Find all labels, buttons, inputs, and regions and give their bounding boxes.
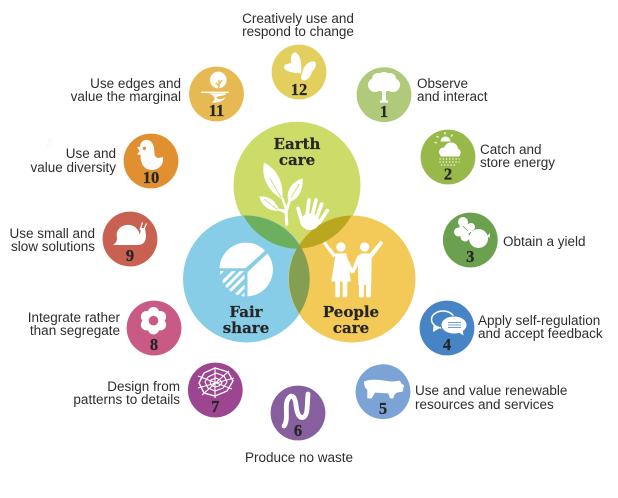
principle 4: apply self-regulation: [420, 301, 603, 355]
label: Integrate rather: [28, 310, 120, 325]
principle 12: respond to change: 12: [291, 80, 307, 99]
principle 2: catch and store energy: [421, 130, 555, 184]
principle 11: edges and the marginal: 11: [209, 101, 224, 120]
icon: speech bubbles: [432, 311, 467, 336]
label: Use and: [66, 146, 116, 161]
principle 5: renewable resources: [356, 364, 567, 419]
label: than segregate: [30, 323, 120, 338]
label: Catch and: [480, 142, 542, 157]
icon: plant and hand: [259, 163, 327, 230]
principle 5: renewable resources: 5: [379, 399, 387, 418]
circle: fair share: [183, 216, 310, 342]
label: Design from: [107, 379, 180, 394]
principle 6: produce no waste: 6: [294, 421, 302, 440]
overlap: earth and people care: [297, 216, 352, 249]
heading: earth care: Earth: [274, 135, 321, 153]
icon: butterfly: [284, 52, 316, 80]
icon: two people: [323, 241, 383, 297]
label: store energy: [480, 155, 555, 170]
icon: spider web: [198, 367, 234, 398]
icon: snail: [113, 222, 146, 245]
label: value the marginal: [71, 89, 181, 104]
label: Produce no waste: [245, 450, 353, 465]
label: respond to change: [242, 24, 354, 39]
principle 3: obtain a yield: [443, 213, 586, 267]
icon: tree on river bank: [201, 72, 229, 103]
principle 4: apply self-regulation: 4: [443, 335, 451, 354]
icon: flower: [141, 307, 166, 334]
icon: tree: [368, 72, 400, 103]
label: Use small and: [9, 226, 95, 241]
circle: people care: [288, 216, 416, 342]
principle 10: use and value diversity: [30, 134, 178, 188]
overlap: fair share and people care: [289, 244, 310, 314]
label: Apply self-regulation: [478, 313, 600, 328]
heading: people care: People: [323, 303, 379, 321]
label: Observe: [417, 76, 468, 91]
label: and accept feedback: [478, 326, 603, 341]
principle 8: integrate: [28, 301, 181, 355]
circle: earth care: [234, 122, 360, 249]
icon: pig: [364, 380, 404, 398]
principle 10: use and value diversity: 10: [143, 168, 159, 187]
label: resources and services: [415, 397, 554, 412]
label: Use and value renewable: [415, 383, 567, 398]
label: slow solutions: [11, 239, 95, 254]
icon: bird: [137, 140, 163, 170]
principle 7: patterns to details: 7: [211, 397, 219, 416]
venn diagram: ethics: share: [223, 319, 269, 337]
icon: sun, cloud and rain: [434, 132, 461, 165]
label: patterns to details: [73, 392, 180, 407]
icon: pie chart: [220, 242, 273, 296]
principle 11: edges and the marginal: [71, 67, 244, 121]
overlap: earth and fair share: [243, 216, 299, 249]
venn diagram: ethics: care: [279, 151, 315, 169]
heading: fair share: Fair: [229, 303, 264, 321]
label: value diversity: [30, 160, 116, 175]
principle 1: observe and interact: [357, 67, 488, 122]
principle 1: observe and interact: 1: [380, 102, 388, 121]
venn diagram: ethics: care: [333, 319, 369, 337]
icon: worm: [284, 394, 308, 426]
principle 3: obtain a yield: 3: [466, 247, 474, 266]
principle 7: patterns to details: [73, 363, 243, 417]
label: Obtain a yield: [503, 234, 586, 249]
venn diagram: ethics: [183, 122, 416, 342]
label: Use edges and: [90, 76, 181, 91]
principle 12: respond to change: [242, 11, 354, 99]
label: Creatively use and: [242, 11, 354, 26]
principle 2: catch and store energy: 2: [444, 164, 452, 184]
principle 8: integrate: 8: [150, 335, 158, 354]
label: and interact: [417, 89, 488, 104]
principle 6: produce no waste: [245, 386, 353, 465]
principle 9: small and slow solutions: [9, 212, 157, 266]
principle 9: small and slow solutions: 9: [126, 246, 134, 265]
icon: beetroot: [454, 217, 490, 248]
